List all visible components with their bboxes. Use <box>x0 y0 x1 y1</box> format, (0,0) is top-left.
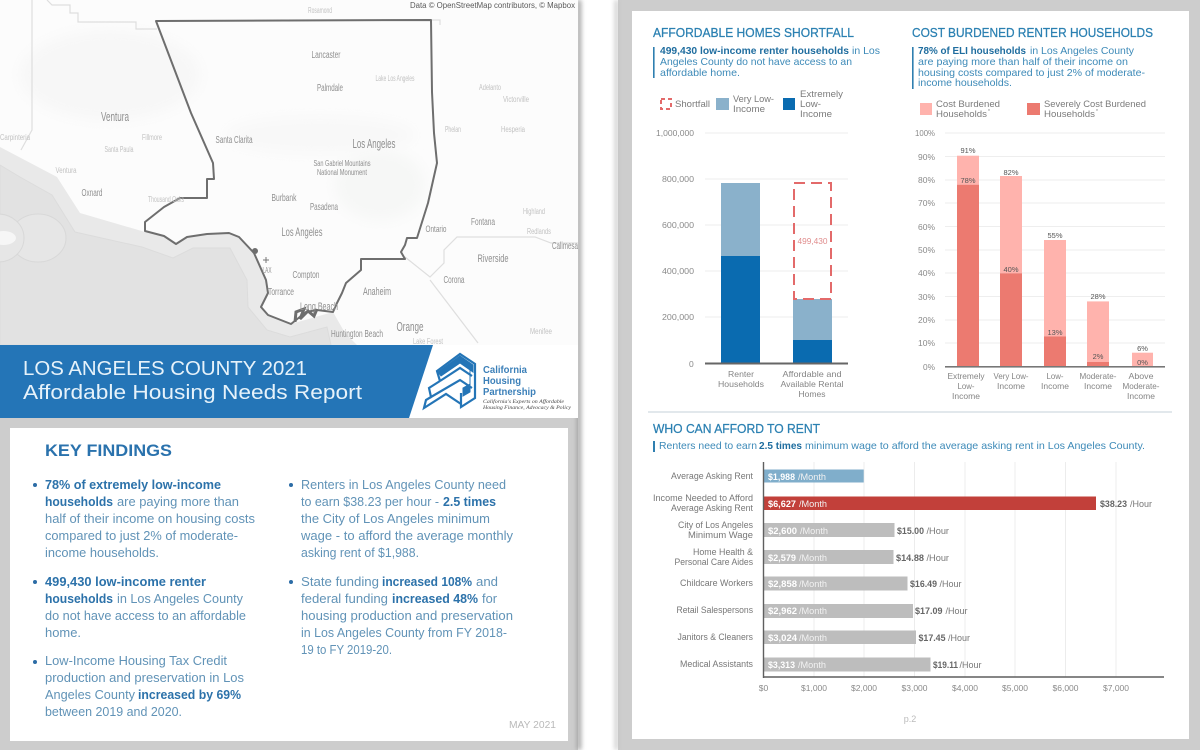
stacked bar chart: Income <box>1041 381 1069 391</box>
x axis labels <box>759 683 1129 693</box>
callout: 2.5 times <box>759 440 802 452</box>
legend: Cost Burdened <box>936 99 1000 110</box>
x axis labels: $3,000 <box>902 683 928 693</box>
row: medical assistants: /Hour <box>960 660 982 671</box>
stacked bar chart: 0% <box>923 362 935 372</box>
map labels: Carpinteria <box>0 133 30 142</box>
finding: funding: increased 48% <box>392 592 478 606</box>
row: childcare workers: Childcare Workers <box>680 578 753 588</box>
finding: shortfall: in Los Angeles County <box>117 592 244 606</box>
heading: key findings: KEY FINDINGS <box>45 441 172 460</box>
stacked bar chart: 60% <box>918 222 935 232</box>
legend: Very Low- <box>733 94 774 105</box>
stacked bar chart: Moderate- <box>1080 371 1117 381</box>
finding: tax credit: increased by 69% <box>138 688 241 702</box>
row: medical assistants: $19.11 <box>933 660 959 671</box>
stacked bar chart: Households <box>718 379 764 389</box>
row: income needed: $38.23 <box>1100 499 1127 510</box>
x axis labels: $0 <box>759 683 768 693</box>
row: medical assistants: Medical Assistants <box>680 659 753 669</box>
row: average asking rent <box>671 470 864 483</box>
bar: extremely low-income <box>957 146 979 367</box>
heading: AFFORDABLE HOMES SHORTFALL <box>653 26 854 40</box>
logo text: Housing Finance, Advocacy & Policy <box>482 405 572 411</box>
stacked bar chart: 800,000 <box>662 174 694 184</box>
row: income needed: /Hour <box>1130 499 1152 510</box>
row: minimum wage: /Month <box>800 526 828 537</box>
finding: funding: increased 108% <box>382 575 472 589</box>
row: retail salespersons: /Month <box>799 606 827 617</box>
callout: income households. <box>918 77 1012 89</box>
county outline <box>145 20 437 324</box>
map labels: Fontana <box>471 217 495 228</box>
legend: Severely Cost Burdened <box>1044 99 1146 110</box>
row: minimum wage: /Hour <box>926 526 949 537</box>
map labels: Corona <box>444 275 465 286</box>
map labels: Huntington Beach <box>331 329 383 340</box>
map labels: Victorville <box>503 95 529 104</box>
row: retail salespersons <box>676 604 968 618</box>
row: medical assistants: /Month <box>798 660 826 671</box>
row: home health aides <box>674 547 949 567</box>
bar: above moderate-income <box>1132 344 1153 367</box>
map labels: Burbank <box>272 192 297 204</box>
bar: above moderate-income: 6% <box>1137 344 1148 353</box>
bar: moderate-income: 28% <box>1090 292 1106 301</box>
stacked bar chart: Income <box>997 381 1025 391</box>
title: Affordable Housing Needs Report <box>23 382 363 404</box>
x axis labels: $7,000 <box>1103 683 1129 693</box>
bar: very low-income <box>1000 168 1022 367</box>
bar: above moderate-income: 0% <box>1137 358 1148 367</box>
logo text: California <box>483 364 527 376</box>
callout: 78% of ELI households <box>918 45 1026 57</box>
finding: wage: to earn $38.23 per hour - <box>301 495 439 509</box>
bar: low-income: 55% <box>1047 231 1063 240</box>
bar: moderate-income <box>1087 292 1109 367</box>
legend: Low- <box>800 99 821 110</box>
stacked bar chart: Low- <box>1046 371 1064 381</box>
finding: wage <box>289 478 514 560</box>
row: home health aides: Personal Care Aides <box>674 557 753 567</box>
legend <box>920 99 1146 120</box>
row: janitors and cleaners: /Hour <box>948 633 970 644</box>
row: medical assistants <box>680 658 982 672</box>
logo text: Housing <box>483 375 521 387</box>
finding: funding <box>289 575 513 657</box>
callout <box>912 45 1145 89</box>
bar: extremely low-income: 78% <box>960 176 976 185</box>
row: income needed: Income Needed to Afford <box>653 493 753 503</box>
map labels: Anaheim <box>363 286 391 298</box>
row: retail salespersons: /Hour <box>946 606 968 617</box>
map labels: Thousand Oaks <box>148 195 184 204</box>
map labels: Ventura <box>56 166 77 175</box>
stacked bar chart: 400,000 <box>662 266 694 276</box>
map labels: Ontario <box>426 224 446 235</box>
stacked bar chart: Very Low- <box>994 371 1029 381</box>
panel: key findings <box>10 428 568 741</box>
bar: very low-income: 82% <box>1003 168 1019 177</box>
row: minimum wage: $2,600 <box>768 526 797 537</box>
row: average asking rent: /Month <box>798 472 826 483</box>
bar: affordable and available homes <box>793 299 832 363</box>
finding: shortfall: home. <box>45 626 81 640</box>
map labels: Hesperia <box>501 125 525 134</box>
shortfall dashed box: 499,430 <box>798 236 828 246</box>
legend: Households <box>1044 109 1095 120</box>
map labels: Long Beach <box>300 301 338 313</box>
map labels: Torrance <box>268 287 294 298</box>
logo: California Housing Partnership <box>424 354 572 411</box>
finding: cost burden: compared to just 2% of moderate- <box>45 529 238 543</box>
callout: affordable home. <box>660 67 740 79</box>
map labels: Menifee <box>530 327 552 336</box>
map labels: Lake Forest <box>413 337 444 346</box>
finding: funding: housing production and preservation <box>301 609 513 623</box>
stacked bar chart: 30% <box>918 292 935 302</box>
row: retail salespersons: $2,962 <box>768 606 797 617</box>
finding: wage: 2.5 times <box>443 495 496 509</box>
x axis labels: $5,000 <box>1002 683 1028 693</box>
map labels: Santa Paula <box>104 145 134 154</box>
row: minimum wage: Minimum Wage <box>688 530 753 540</box>
map labels: Santa Clarita <box>216 135 253 146</box>
finding: wage: the City of Los Angeles minimum <box>301 512 490 526</box>
finding: cost burden: households <box>45 495 113 509</box>
stacked bar chart: Low- <box>958 381 975 391</box>
x axis labels: $6,000 <box>1052 683 1079 693</box>
bar: low-income: 13% <box>1047 328 1063 337</box>
stacked bar chart: 40% <box>918 268 935 278</box>
bar: extremely low-income: 91% <box>960 146 976 155</box>
panel: left page background <box>0 0 578 750</box>
finding: funding: State funding <box>301 575 379 589</box>
finding: tax credit <box>33 654 244 719</box>
bar: low-income <box>1044 231 1066 367</box>
row: childcare workers: /Month <box>799 579 827 590</box>
legend: * <box>988 109 990 115</box>
logo text: Partnership <box>483 386 536 398</box>
section: who can afford to rent <box>653 422 1164 693</box>
row: medical assistants: $3,313 <box>768 660 795 671</box>
row: childcare workers: $2,858 <box>768 579 797 590</box>
map labels: Pasadena <box>310 201 338 213</box>
shortfall dashed box <box>794 183 831 299</box>
title banner <box>0 345 433 418</box>
legend: Income <box>800 109 832 120</box>
finding: cost burden <box>33 478 255 560</box>
stacked bar chart: 90% <box>918 152 935 162</box>
map labels: Oxnard <box>82 188 102 199</box>
map labels: Redlands <box>527 227 551 236</box>
county boundaries <box>21 0 578 343</box>
finding: wage: Renters in Los Angeles County need <box>301 478 506 492</box>
row: childcare workers <box>680 576 962 590</box>
legend <box>661 89 843 120</box>
row: minimum wage: $15.00 <box>897 526 924 537</box>
callout: in Los Angeles County <box>1030 45 1135 57</box>
title: LOS ANGELES COUNTY 2021 <box>23 358 307 380</box>
stacked bar chart <box>656 128 848 399</box>
row: income needed <box>653 493 1152 513</box>
panel: right page content <box>632 11 1189 739</box>
legend: Shortfall <box>675 99 710 110</box>
row: average asking rent: $1,988 <box>768 472 795 483</box>
stacked bar chart: Income <box>952 391 980 401</box>
callout: minimum wage to afford the average asking rent in Los Angeles County. <box>805 440 1145 452</box>
map labels: Lancaster <box>312 50 341 61</box>
row: janitors and cleaners: /Month <box>799 633 827 644</box>
row: minimum wage <box>678 520 949 540</box>
row: janitors and cleaners: $17.45 <box>918 633 946 644</box>
legend: Households <box>936 109 987 120</box>
page number: p.2 <box>904 714 916 724</box>
stacked bar chart: Income <box>1084 381 1112 391</box>
title <box>23 358 363 404</box>
map labels: Rosamond <box>308 6 332 15</box>
finding: cost burden: half of their income on housing costs <box>45 512 255 526</box>
map: Los Angeles County <box>0 0 578 346</box>
callout: in Los <box>852 45 880 57</box>
bar: moderate-income: 2% <box>1093 352 1104 361</box>
map labels: Calimesa <box>552 241 578 252</box>
legend: * <box>1096 109 1098 115</box>
finding: funding: federal funding <box>301 592 388 606</box>
map labels: Los Angeles <box>282 225 322 239</box>
callout: 499,430 low-income renter households <box>660 45 849 57</box>
panel: right page background <box>618 0 1200 750</box>
map attribution: Data © OpenStreetMap contributors, © Mapbox <box>410 1 575 10</box>
icon: stacked house chevrons <box>424 354 475 408</box>
map labels: Ventura <box>101 109 129 124</box>
row: janitors and cleaners: Janitors & Cleaners <box>678 632 753 642</box>
stacked bar chart: 70% <box>918 198 935 208</box>
map labels: Orange <box>396 319 424 334</box>
finding: cost burden: are paying more than <box>117 495 239 509</box>
finding: funding: for <box>482 592 497 606</box>
row: income needed: Average Asking Rent <box>671 503 753 513</box>
stacked bar chart: Affordable and <box>782 369 842 379</box>
finding: wage: asking rent of $1,988. <box>301 546 419 560</box>
finding: shortfall: households <box>45 592 113 606</box>
row: income needed: $6,627 <box>768 499 796 510</box>
stacked bar chart: Moderate- <box>1122 381 1160 391</box>
callout: are paying more than half of their income on <box>918 56 1128 68</box>
map labels: Highland <box>523 207 545 216</box>
finding: shortfall: do not have access to an affordable <box>45 609 246 623</box>
bar: very low-income: 40% <box>1003 265 1019 274</box>
date: MAY 2021 <box>509 719 556 731</box>
callout <box>653 440 1145 452</box>
row: home health aides: /Month <box>799 553 827 564</box>
stacked bar chart: 50% <box>918 245 935 255</box>
x axis labels: $4,000 <box>952 683 978 693</box>
map labels: Lake Los Angeles <box>376 74 414 83</box>
finding: cost burden: income households. <box>45 546 159 560</box>
stacked bar chart: 1,000,000 <box>656 128 694 138</box>
map labels: San Gabriel Mountains <box>314 159 370 168</box>
finding: tax credit: between 2019 and 2020. <box>45 705 182 719</box>
logo text: California's Experts on Affordable <box>483 398 565 405</box>
stacked bar chart: 200,000 <box>662 312 694 322</box>
stacked bar chart: 10% <box>918 338 935 348</box>
stacked bar chart: Above <box>1128 371 1154 381</box>
finding: wage: wage - to afford the average monthly <box>300 529 514 543</box>
legend: Income <box>733 104 765 115</box>
horizontal bar chart <box>653 462 1164 693</box>
ocean <box>0 147 357 345</box>
stacked bar chart: 20% <box>918 315 935 325</box>
finding: funding: and <box>476 575 498 589</box>
stacked bar chart: Extremely <box>948 371 985 381</box>
row: janitors and cleaners: $3,024 <box>768 633 798 644</box>
stacked bar chart: Homes <box>798 389 826 399</box>
heading: WHO CAN AFFORD TO RENT <box>653 422 820 436</box>
map labels: Palmdale <box>317 83 343 94</box>
callout <box>653 45 880 79</box>
finding: tax credit: Low-Income Housing Tax Credit <box>45 654 228 668</box>
stacked bar chart: Income <box>1127 391 1155 401</box>
row: home health aides: $14.88 <box>896 553 924 564</box>
callout: Angeles County do not have access to an <box>660 56 852 68</box>
row: janitors and cleaners <box>678 630 970 644</box>
heading: COST BURDENED RENTER HOUSEHOLDS <box>912 26 1153 40</box>
map labels: LAX <box>262 266 272 275</box>
stacked bar chart: 80% <box>918 175 935 185</box>
row: average asking rent: Average Asking Rent <box>671 471 753 481</box>
map labels <box>0 6 578 346</box>
finding: funding: in Los Angeles County from FY 2018- <box>301 626 507 640</box>
finding: shortfall <box>33 575 246 640</box>
finding: shortfall: 499,430 low-income renter <box>45 575 206 589</box>
map labels: Riverside <box>478 253 508 265</box>
stacked bar chart: Available Rental <box>780 379 844 389</box>
row: childcare workers: $16.49 <box>910 579 937 590</box>
section: cost burdened renter households <box>912 26 1165 401</box>
stacked bar chart: Renter <box>728 369 754 379</box>
row: income needed: /Month <box>799 499 827 510</box>
finding: cost burden: 78% of extremely low-income <box>45 478 221 492</box>
row: childcare workers: /Hour <box>940 579 962 590</box>
map labels: Adelanto <box>479 83 501 92</box>
row: home health aides: Home Health & <box>693 547 753 557</box>
row: retail salespersons: $17.09 <box>915 606 942 617</box>
logo panel background <box>405 345 578 418</box>
stacked bar chart <box>915 128 1165 401</box>
row: minimum wage: City of Los Angeles <box>678 520 753 530</box>
map labels: Compton <box>292 270 320 281</box>
x axis labels: $2,000 <box>851 683 877 693</box>
x axis labels: $1,000 <box>801 683 827 693</box>
bar: renter households <box>721 183 760 363</box>
callout: Renters need to earn <box>659 440 757 452</box>
map labels: National Monument <box>317 168 368 177</box>
callout: housing costs compared to just 2% of moderate- <box>918 67 1145 79</box>
stacked bar chart: 600,000 <box>662 220 694 230</box>
legend: Extremely <box>800 89 843 100</box>
finding: funding: 19 to FY 2019-20. <box>301 643 392 657</box>
section: affordable homes shortfall <box>653 26 880 399</box>
map labels: Los Angeles <box>352 136 396 151</box>
map labels: Fillmore <box>142 133 162 142</box>
stacked bar chart: 100% <box>915 128 935 138</box>
map labels: Phelan <box>445 125 461 134</box>
row: retail salespersons: Retail Salespersons <box>676 605 753 615</box>
row: home health aides: $2,579 <box>768 553 796 564</box>
row: home health aides: /Hour <box>926 553 949 564</box>
finding: tax credit: Angeles County <box>45 688 136 702</box>
stacked bar chart: 0 <box>689 359 694 369</box>
logo text <box>482 364 572 411</box>
finding: tax credit: production and preservation in Los <box>45 671 244 685</box>
